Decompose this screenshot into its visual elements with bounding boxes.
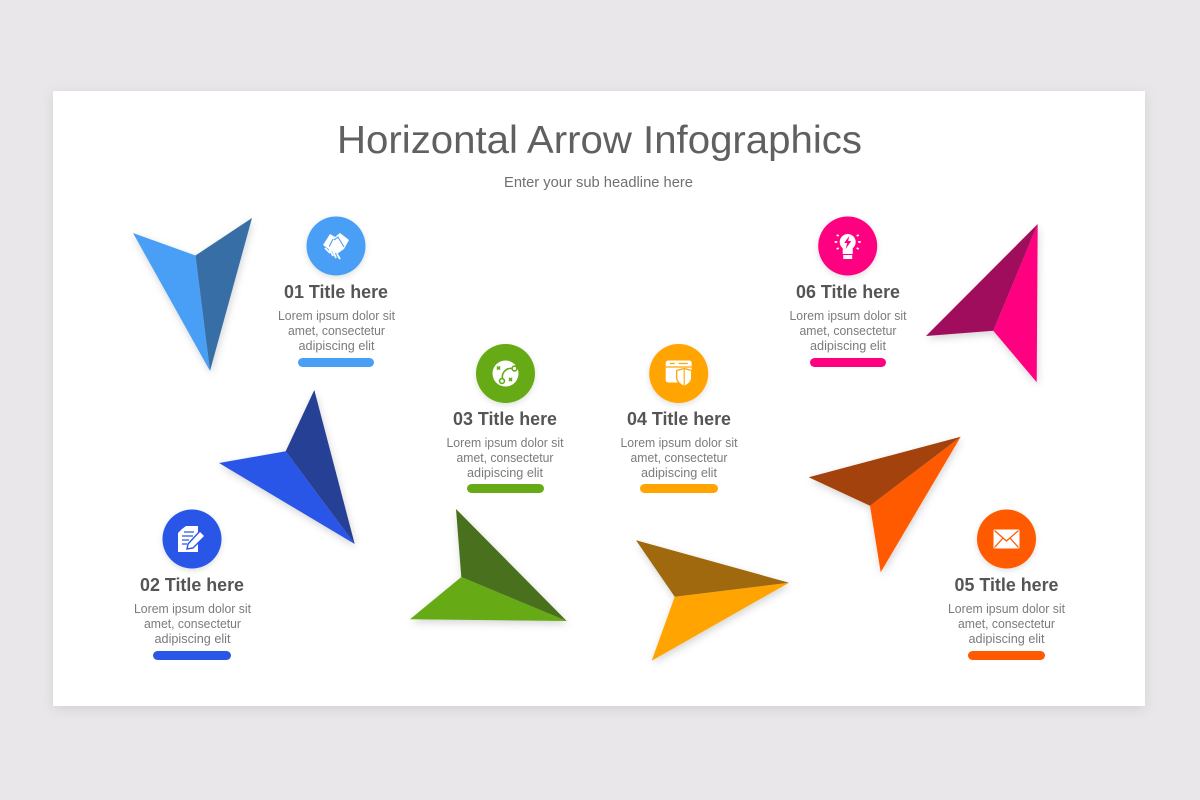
accent bar xyxy=(640,484,718,493)
heading: 06 Title here xyxy=(796,282,900,302)
item 03: amet, consectetur xyxy=(456,451,554,465)
icon: envelope xyxy=(977,510,1036,568)
icon: strategy play xyxy=(476,344,535,403)
item 06: adipiscing elit xyxy=(810,339,887,353)
accent bar xyxy=(968,651,1045,660)
description: Lorem ipsum dolor sit xyxy=(790,309,907,323)
icon: handshake xyxy=(306,216,366,276)
item 01: amet, consectetur xyxy=(288,324,385,338)
description: Lorem ipsum dolor sit xyxy=(948,602,1066,616)
subtitle: Enter your sub headline here xyxy=(504,175,693,191)
arrow 01: blue xyxy=(133,218,252,371)
icon: light bulb xyxy=(818,216,877,276)
accent bar xyxy=(298,358,374,367)
item 06 xyxy=(790,216,907,367)
item 03: adipiscing elit xyxy=(467,466,544,480)
arrow 04: amber xyxy=(636,540,789,661)
white slide panel xyxy=(53,91,1145,706)
item 02 xyxy=(134,510,252,660)
accent bar xyxy=(810,358,886,367)
accent bar xyxy=(467,484,544,493)
heading: 02 Title here xyxy=(140,575,244,595)
description: Lorem ipsum dolor sit xyxy=(620,436,738,450)
item 05: amet, consectetur xyxy=(958,617,1055,631)
arrow 02: royal blue xyxy=(219,390,355,544)
item 05: adipiscing elit xyxy=(968,632,1045,646)
item 02: adipiscing elit xyxy=(154,632,231,646)
accent bar xyxy=(153,651,231,660)
item 05 xyxy=(948,510,1066,660)
heading: 04 Title here xyxy=(627,409,731,429)
item 03 xyxy=(446,344,564,493)
item 06: amet, consectetur xyxy=(800,324,896,338)
icon: browser and shield xyxy=(649,344,708,403)
item 04 xyxy=(620,344,738,493)
arrow 03: green xyxy=(410,509,567,621)
description: Lorem ipsum dolor sit xyxy=(134,602,252,616)
title: Horizontal Arrow Infographics xyxy=(337,119,862,162)
item 04: amet, consectetur xyxy=(630,451,728,465)
heading: 01 Title here xyxy=(284,282,388,302)
item 01: adipiscing elit xyxy=(298,339,375,353)
description: Lorem ipsum dolor sit xyxy=(278,309,396,323)
item 04: adipiscing elit xyxy=(641,466,718,480)
description: Lorem ipsum dolor sit xyxy=(446,436,564,450)
arrow 05: orange xyxy=(809,437,961,572)
heading: 05 Title here xyxy=(954,575,1058,595)
arrow 06: magenta xyxy=(926,224,1038,382)
item 02: amet, consectetur xyxy=(144,617,241,631)
item 01 xyxy=(278,216,396,367)
icon: document and pencil xyxy=(162,510,222,568)
heading: 03 Title here xyxy=(453,409,557,429)
